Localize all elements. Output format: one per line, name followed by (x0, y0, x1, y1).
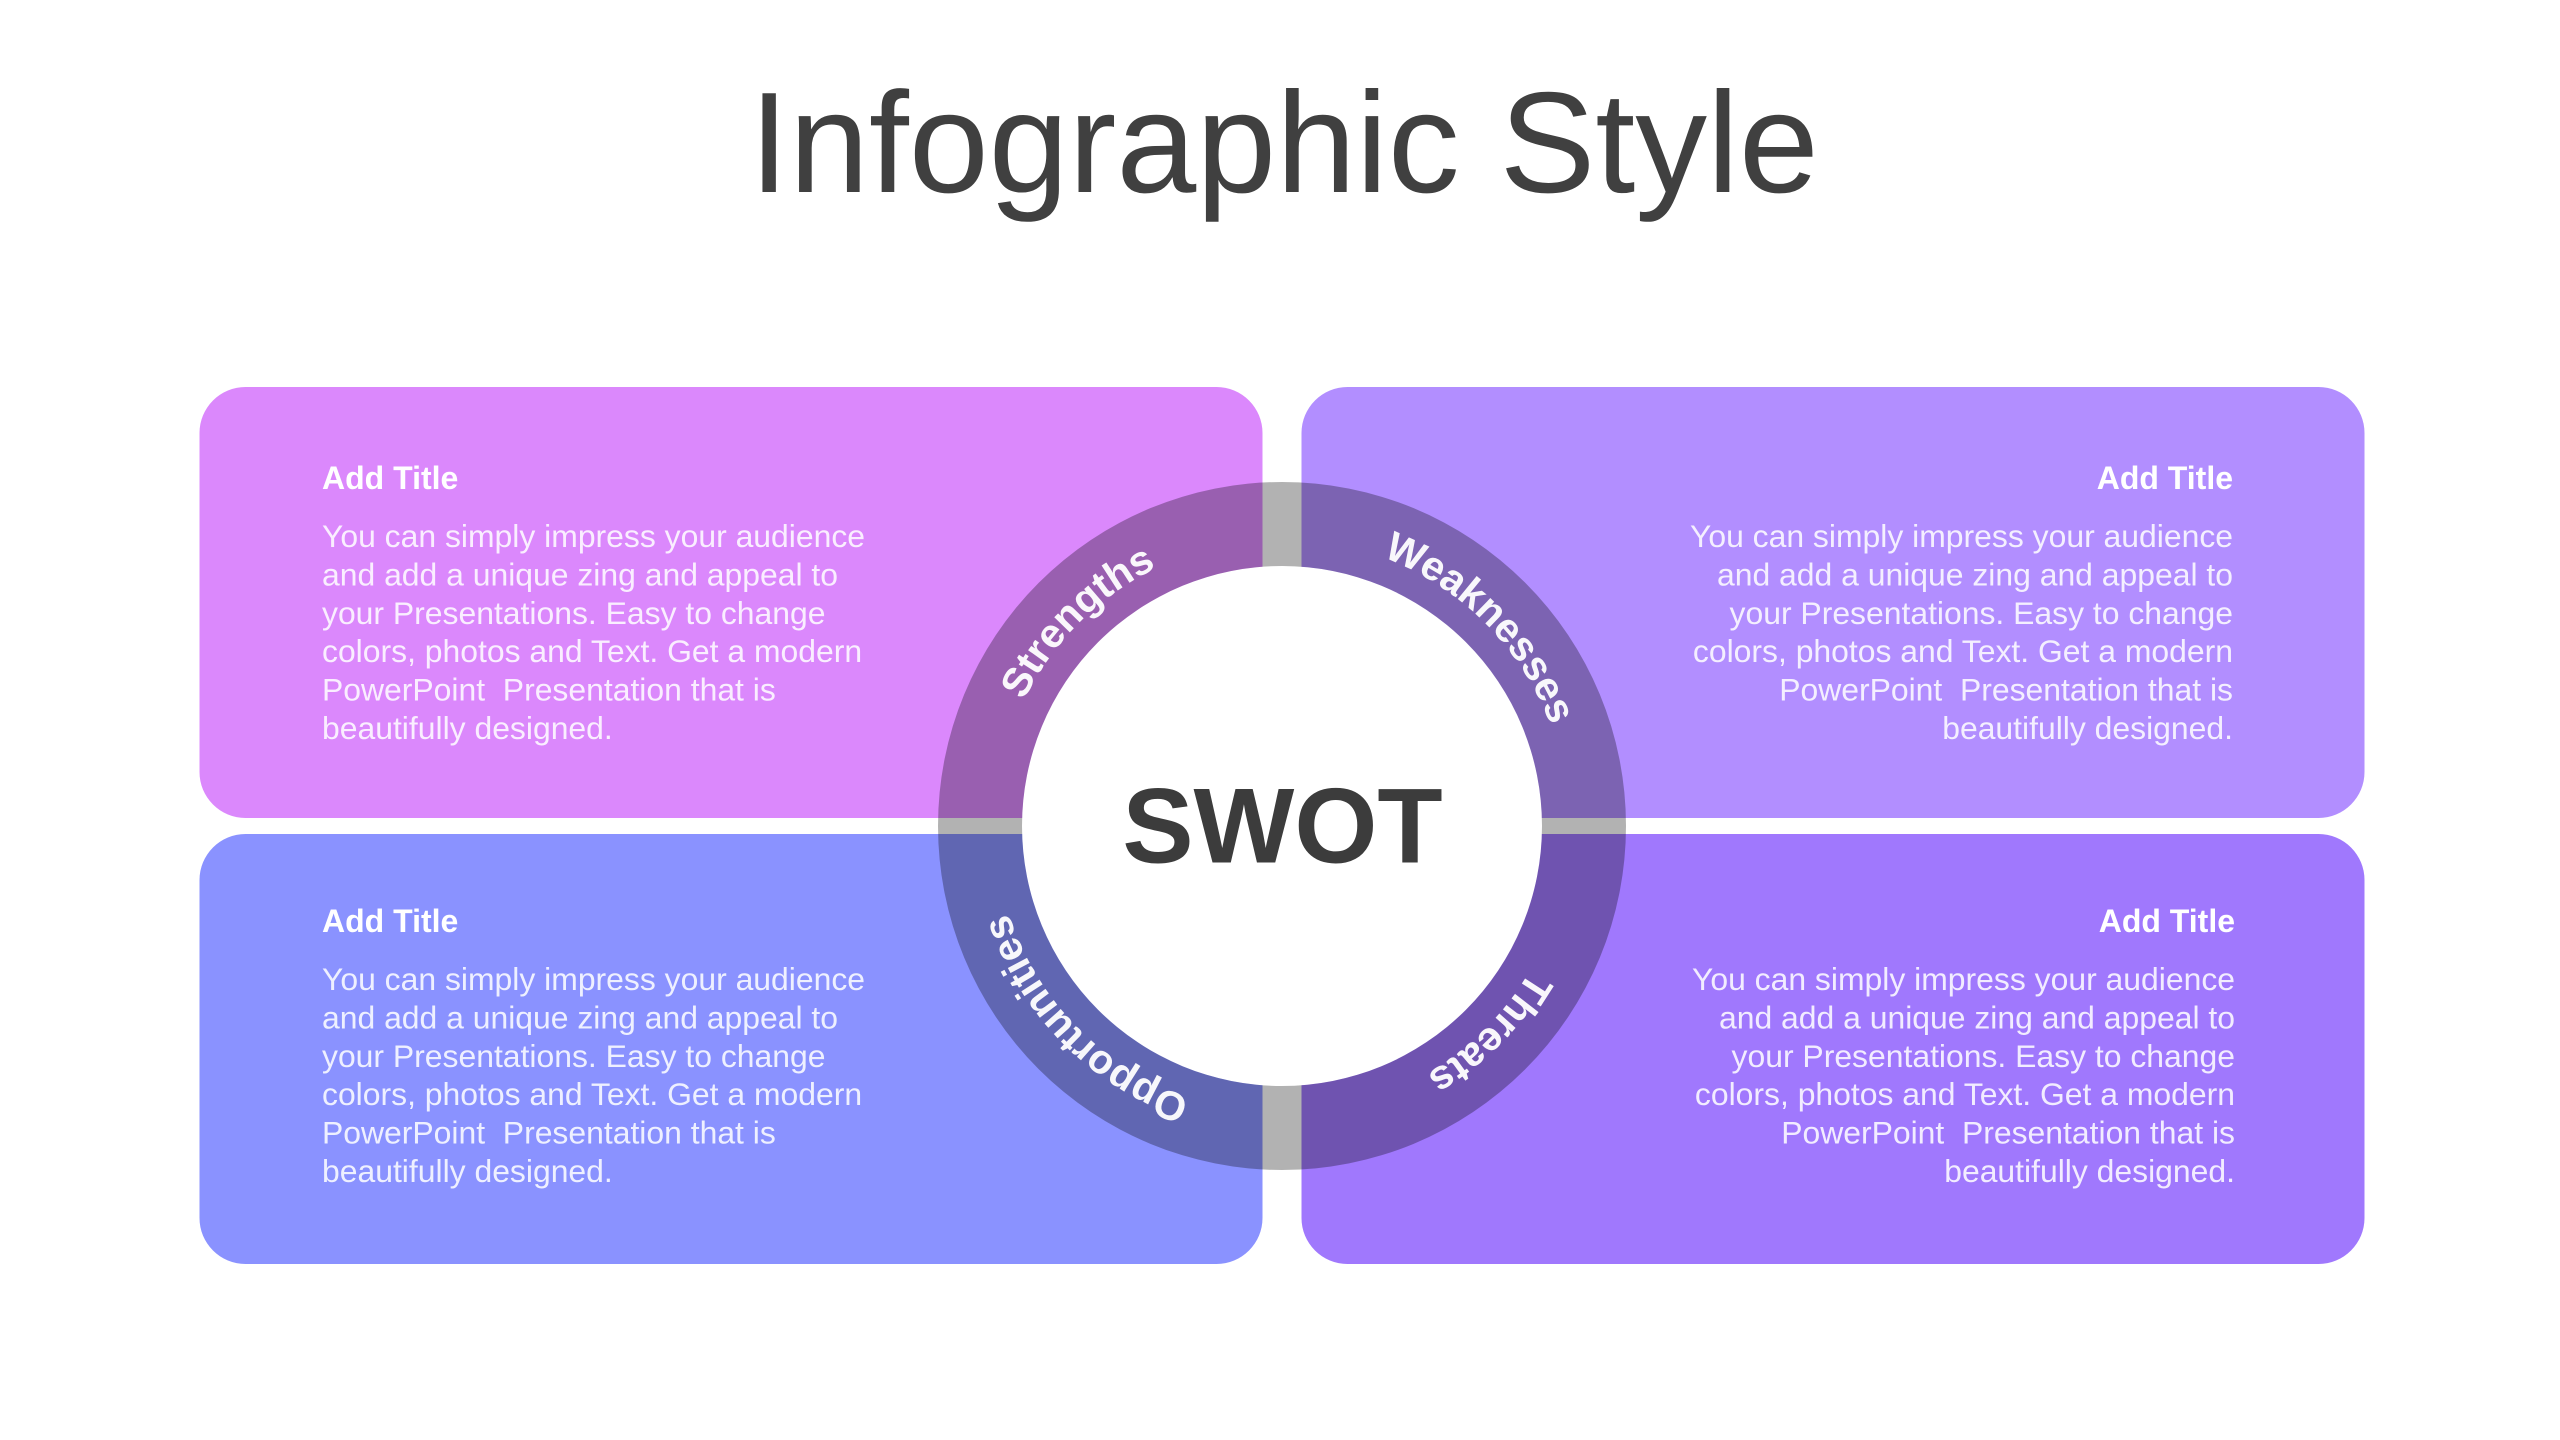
text block: opportunities panel: and add a unique zing and appeal to (322, 999, 838, 1035)
text block: strengths panel: and add a unique zing and appeal to (322, 556, 838, 592)
text block: opportunities panel: beautifully designed. (322, 1153, 613, 1189)
panel: weaknesses (1302, 387, 2364, 818)
text block: opportunities panel: colors, photos and Text. Get a modern (322, 1076, 862, 1112)
ring label: threats: Threats (1430, 978, 1554, 1089)
text block: threats panel: You can simply impress your audience (1692, 961, 2235, 997)
text block: opportunities panel: PowerPoint Presentation that is (322, 1115, 776, 1151)
text block: weaknesses panel: and add a unique zing and appeal to (1717, 556, 2233, 592)
title: Infographic Style (749, 63, 1819, 223)
text block: opportunities panel (322, 961, 865, 1189)
panel: strengths (200, 387, 1262, 818)
panel background: weaknesses (1302, 387, 2364, 818)
text block: threats panel: beautifully designed. (1944, 1153, 2235, 1189)
text block: threats panel: colors, photos and Text. Get a modern (1695, 1076, 2235, 1112)
text block: strengths panel: You can simply impress your audience (322, 518, 865, 554)
panel background: strengths (200, 387, 1262, 818)
text block: threats panel: and add a unique zing and appeal to (1719, 999, 2235, 1035)
text block: weaknesses panel: beautifully designed. (1942, 710, 2233, 746)
panel background: opportunities (200, 834, 1262, 1264)
text block: strengths panel: beautifully designed. (322, 710, 613, 746)
text block: opportunities panel: You can simply impress your audience (322, 961, 865, 997)
text block: strengths panel: your Presentations. Easy to change (322, 595, 825, 631)
ring label: weaknesses: Weaknesses (1389, 530, 1568, 722)
text block: threats panel: PowerPoint Presentation that is (1781, 1115, 2235, 1151)
text block: weaknesses panel (1690, 518, 2233, 746)
ring label: opportunities: Opportunities (990, 916, 1185, 1120)
text block: threats panel: your Presentations. Easy to change (1732, 1038, 2235, 1074)
text block: weaknesses panel: your Presentations. Easy to change (1730, 595, 2233, 631)
text block: strengths panel: colors, photos and Text. Get a modern (322, 633, 862, 669)
translucent ring (938, 482, 1626, 1170)
heading: strengths panel: Add Title (322, 460, 458, 496)
heading: opportunities panel: Add Title (322, 903, 458, 939)
center label: SWOT: SWOT (1122, 766, 1443, 886)
text block: weaknesses panel: PowerPoint Presentation that is (1779, 672, 2233, 708)
text block: weaknesses panel: You can simply impress your audience (1690, 518, 2233, 554)
panel background: threats (1302, 834, 2364, 1264)
text block: opportunities panel: your Presentations. Easy to change (322, 1038, 825, 1074)
text block: threats panel (1692, 961, 2235, 1189)
heading: threats panel: Add Title (2099, 903, 2235, 939)
panel: threats (1302, 834, 2364, 1264)
heading: weaknesses panel: Add Title (2097, 460, 2233, 496)
panel: opportunities (200, 834, 1262, 1264)
text block: strengths panel (322, 518, 865, 746)
text block: weaknesses panel: colors, photos and Text. Get a modern (1693, 633, 2233, 669)
center circle (1022, 566, 1542, 1086)
text block: strengths panel: PowerPoint Presentation that is (322, 672, 776, 708)
ring label: strengths: Strengths (1002, 552, 1153, 696)
